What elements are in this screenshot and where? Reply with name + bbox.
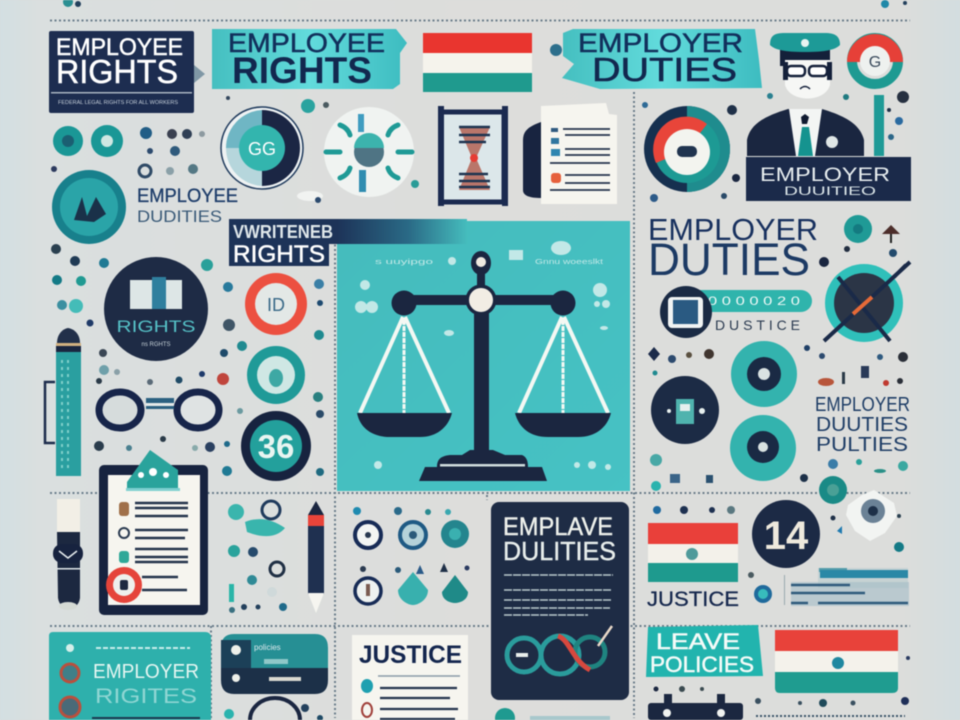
top edge fragments bbox=[63, 0, 907, 8]
icon: red teal ring bbox=[847, 34, 903, 156]
icon: watch bbox=[53, 499, 83, 610]
icon: white gear eye bbox=[846, 490, 897, 541]
text: employee duties: DUDITIES bbox=[137, 207, 222, 226]
icon: teal ring bbox=[247, 346, 305, 404]
heading: rights: RIGHTS bbox=[56, 53, 178, 90]
panel: employee duties dark card bbox=[491, 502, 629, 700]
panel small text: Gnnu woeeslkt bbox=[535, 259, 603, 266]
icon: right top dots bbox=[819, 215, 900, 267]
banner heading: duties: DUTIES bbox=[592, 51, 737, 88]
badge: number 14 bbox=[752, 500, 820, 568]
dots near flag bbox=[653, 506, 904, 578]
text: employer duties policies: PULTIES bbox=[816, 434, 908, 456]
banner heading: rights: RIGHTS bbox=[232, 50, 372, 91]
icon: glasses bbox=[99, 392, 219, 428]
small dots above center bbox=[226, 91, 909, 203]
panel: justice document bbox=[352, 635, 468, 720]
right heading: employer duties bbox=[648, 212, 818, 285]
icon: officer bbox=[747, 33, 864, 156]
icon: teal circle upper bbox=[731, 341, 797, 407]
scattered icons: mid left bbox=[228, 501, 470, 613]
icon: dark rights circle: ns RGHTS bbox=[141, 342, 171, 348]
icon: red teal ring: G bbox=[869, 54, 881, 71]
panel icon: red rings bbox=[60, 664, 80, 717]
icon: profile with pill bbox=[660, 286, 812, 338]
dial: bottom bbox=[224, 698, 323, 720]
banner heading: employee: EMPLOYEE bbox=[228, 28, 385, 58]
panel: employee duties dark card: DULITIES bbox=[503, 536, 616, 566]
icon: clipboard checklist bbox=[99, 450, 208, 615]
icon: infinity loops bbox=[507, 626, 612, 674]
icon: profile with pill: 0 0 0 0 0 2 0 bbox=[708, 294, 800, 308]
panel: employer rights: RIGITES bbox=[95, 685, 197, 708]
heading: written rights label: RIGHTS bbox=[233, 241, 325, 268]
icon: number badge bbox=[241, 411, 311, 481]
panel heading: EMPLOYER bbox=[93, 661, 199, 683]
icon grid: small badges bbox=[355, 520, 469, 605]
icon: calendar bbox=[648, 694, 743, 720]
badge: leave policies bbox=[646, 625, 763, 677]
badge: leave policies: LEAVE bbox=[656, 629, 740, 654]
heading: written rights label bbox=[229, 219, 467, 268]
icon: red pen bbox=[308, 501, 324, 613]
icon: dark rights circle bbox=[104, 257, 208, 361]
panel: employee rights dark label bbox=[49, 31, 205, 113]
heading: written rights label: VWRITENEB bbox=[233, 222, 333, 242]
panel: central justice scale bbox=[229, 219, 630, 491]
left small circles bbox=[51, 125, 205, 177]
icon: bottom teal dot bbox=[495, 708, 515, 720]
icon: large teal circle bbox=[52, 170, 126, 244]
card heading: EMPLAVE bbox=[503, 513, 613, 541]
panel: dark app card: policies bbox=[254, 643, 281, 652]
text: justice: JUSTICE bbox=[647, 588, 739, 611]
icon: donut right bbox=[644, 106, 730, 192]
panel small text bbox=[355, 241, 611, 470]
lower right dots bbox=[654, 656, 910, 707]
text: employer duties policies: DUUTIES bbox=[816, 414, 908, 436]
flag: justice bbox=[648, 523, 738, 582]
banner: employer duties bbox=[550, 28, 762, 89]
icon: white gear circle bbox=[324, 107, 414, 197]
icon: scales of justice bbox=[357, 251, 611, 481]
text: employer duties policies bbox=[815, 394, 910, 456]
flag: top bbox=[423, 33, 532, 92]
label: employer duties dark box: EMPLOYER bbox=[760, 165, 890, 186]
icon: red ring: ID bbox=[267, 295, 285, 315]
icon: red ring bbox=[245, 273, 307, 335]
label: employer duties dark box bbox=[746, 157, 911, 201]
icon: hourglass frame bbox=[438, 106, 508, 206]
dots: right column bbox=[648, 345, 908, 491]
text: dustice: DUSTICE bbox=[715, 317, 800, 333]
icon: pie ring left: GG bbox=[248, 139, 276, 159]
right heading: employer duties: EMPLOYER bbox=[648, 212, 818, 247]
icon: pie ring left bbox=[221, 107, 303, 189]
text: employee duties bbox=[137, 186, 238, 226]
icon: teal circle lower bbox=[730, 415, 796, 481]
panel: employer rights bbox=[49, 632, 211, 720]
icon: dark circle bbox=[651, 376, 719, 444]
caption: FEDERAL LEGAL RIGHTS FOR ALL WORKERS bbox=[58, 100, 178, 106]
panel small text: s uuyipgo bbox=[375, 259, 433, 266]
panel: dark app card bbox=[221, 634, 328, 694]
icon: clock dial bbox=[824, 262, 910, 342]
document heading: JUSTICE bbox=[359, 641, 462, 669]
icon: dark rights circle: RIGHTS bbox=[116, 317, 196, 336]
left area dots bbox=[51, 244, 324, 476]
label: employer duties dark box: DUUITIEO bbox=[784, 184, 876, 198]
heading: employee: EMPLOYEE bbox=[56, 34, 183, 61]
right heading: employer duties: DUTIES bbox=[648, 234, 810, 285]
icon: document bbox=[523, 103, 617, 204]
badge: leave policies: POLICIES bbox=[650, 652, 754, 677]
icon: teal pen bbox=[45, 328, 81, 476]
text: employer duties policies: EMPLOYER bbox=[815, 394, 910, 416]
icon: number badge: 36 bbox=[258, 428, 294, 465]
icon: small teal emblem bbox=[819, 476, 847, 504]
banner heading: employer: EMPLOYER bbox=[578, 28, 743, 58]
banner: employee rights bbox=[212, 28, 407, 91]
chart: data bars bbox=[754, 568, 909, 606]
text: employee duties: EMPLOYEE bbox=[137, 186, 238, 207]
flag: leave bbox=[775, 630, 898, 693]
badge: number 14: 14 bbox=[764, 514, 809, 558]
